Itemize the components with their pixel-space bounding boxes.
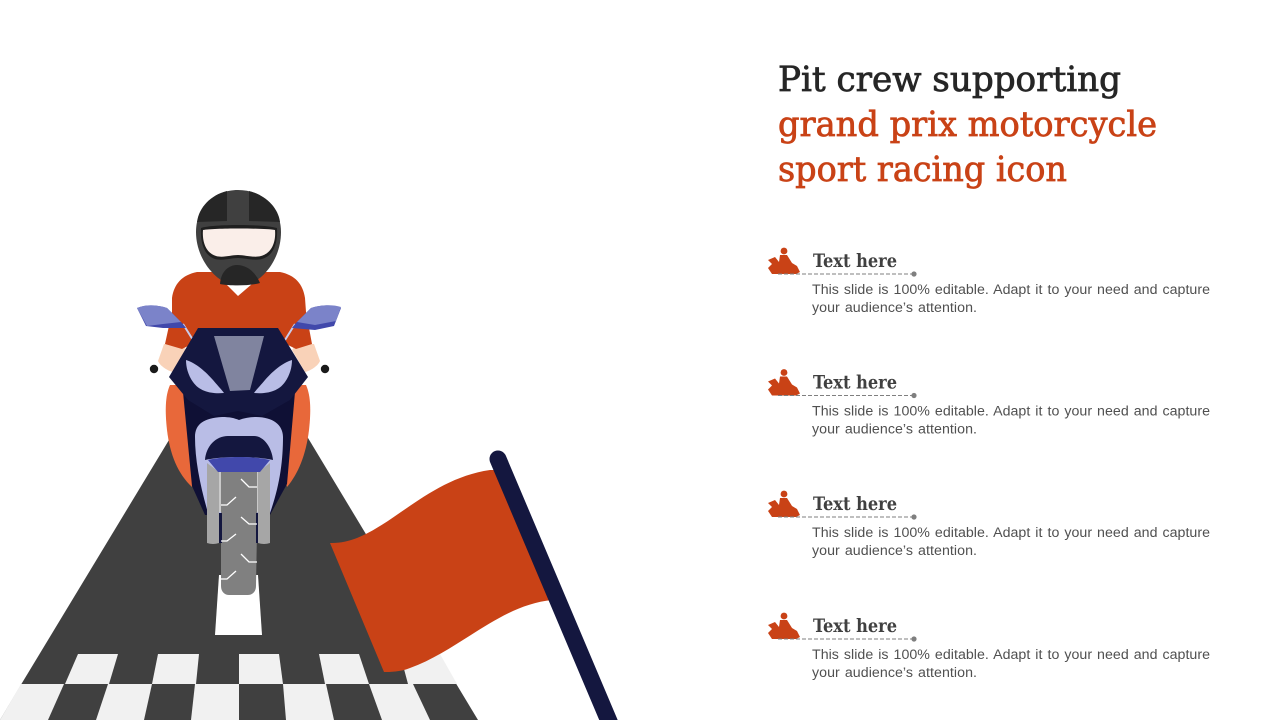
illustration: motorcycle rider — [137, 190, 341, 595]
body text: This slide is 100% editable. Adapt it to your need and capture — [812, 525, 1210, 541]
handlebar grips — [150, 365, 158, 373]
illustration: red flag — [330, 459, 611, 720]
checkered finish line — [0, 654, 457, 720]
heading: Text here — [813, 616, 897, 637]
body text: This slide is 100% editable. Adapt it to your need and capture — [812, 647, 1210, 663]
front mudguard blue — [208, 457, 270, 472]
title: sport racing icon — [778, 150, 1067, 190]
windscreen — [214, 336, 264, 391]
lower fairing — [183, 392, 295, 515]
body text: your audience’s attention. — [812, 665, 977, 681]
heading: Text here — [813, 251, 897, 272]
rider torso — [165, 272, 312, 349]
flag pole — [498, 459, 611, 720]
body text: This slide is 100% editable. Adapt it to your need and capture — [812, 404, 1210, 420]
list item 2 — [768, 369, 1210, 438]
upper fairing — [169, 328, 308, 416]
list item 1 — [768, 248, 1210, 316]
rider hands — [158, 344, 186, 372]
front forks — [207, 463, 270, 544]
body text — [812, 282, 1210, 316]
list item 3 — [768, 491, 1210, 559]
body text: your audience’s attention. — [812, 543, 977, 559]
title: grand prix motorcycle — [778, 105, 1157, 145]
icon: motorcycle — [768, 613, 800, 639]
headlights — [186, 360, 224, 393]
centre stripe — [215, 575, 262, 635]
body text — [812, 647, 1210, 681]
title — [778, 60, 1157, 190]
neck — [226, 284, 252, 296]
front tyre — [219, 472, 259, 595]
title: Pit crew supporting — [778, 60, 1121, 100]
list item 4 — [768, 613, 1210, 681]
icon: motorcycle — [768, 369, 800, 396]
mirrors — [137, 305, 341, 340]
side fairings — [166, 385, 205, 487]
body text — [812, 525, 1210, 559]
heading: Text here — [813, 494, 897, 515]
front fender — [195, 417, 283, 513]
body text: your audience’s attention. — [812, 422, 977, 438]
heading: Text here — [813, 372, 897, 394]
body text: your audience’s attention. — [812, 300, 977, 316]
illustration: race track — [0, 330, 478, 720]
body text: This slide is 100% editable. Adapt it to your need and capture — [812, 282, 1210, 298]
helmet — [196, 190, 281, 285]
air intake — [205, 436, 273, 460]
body text — [812, 404, 1210, 438]
icon: motorcycle — [768, 248, 800, 274]
icon: motorcycle — [768, 491, 800, 517]
